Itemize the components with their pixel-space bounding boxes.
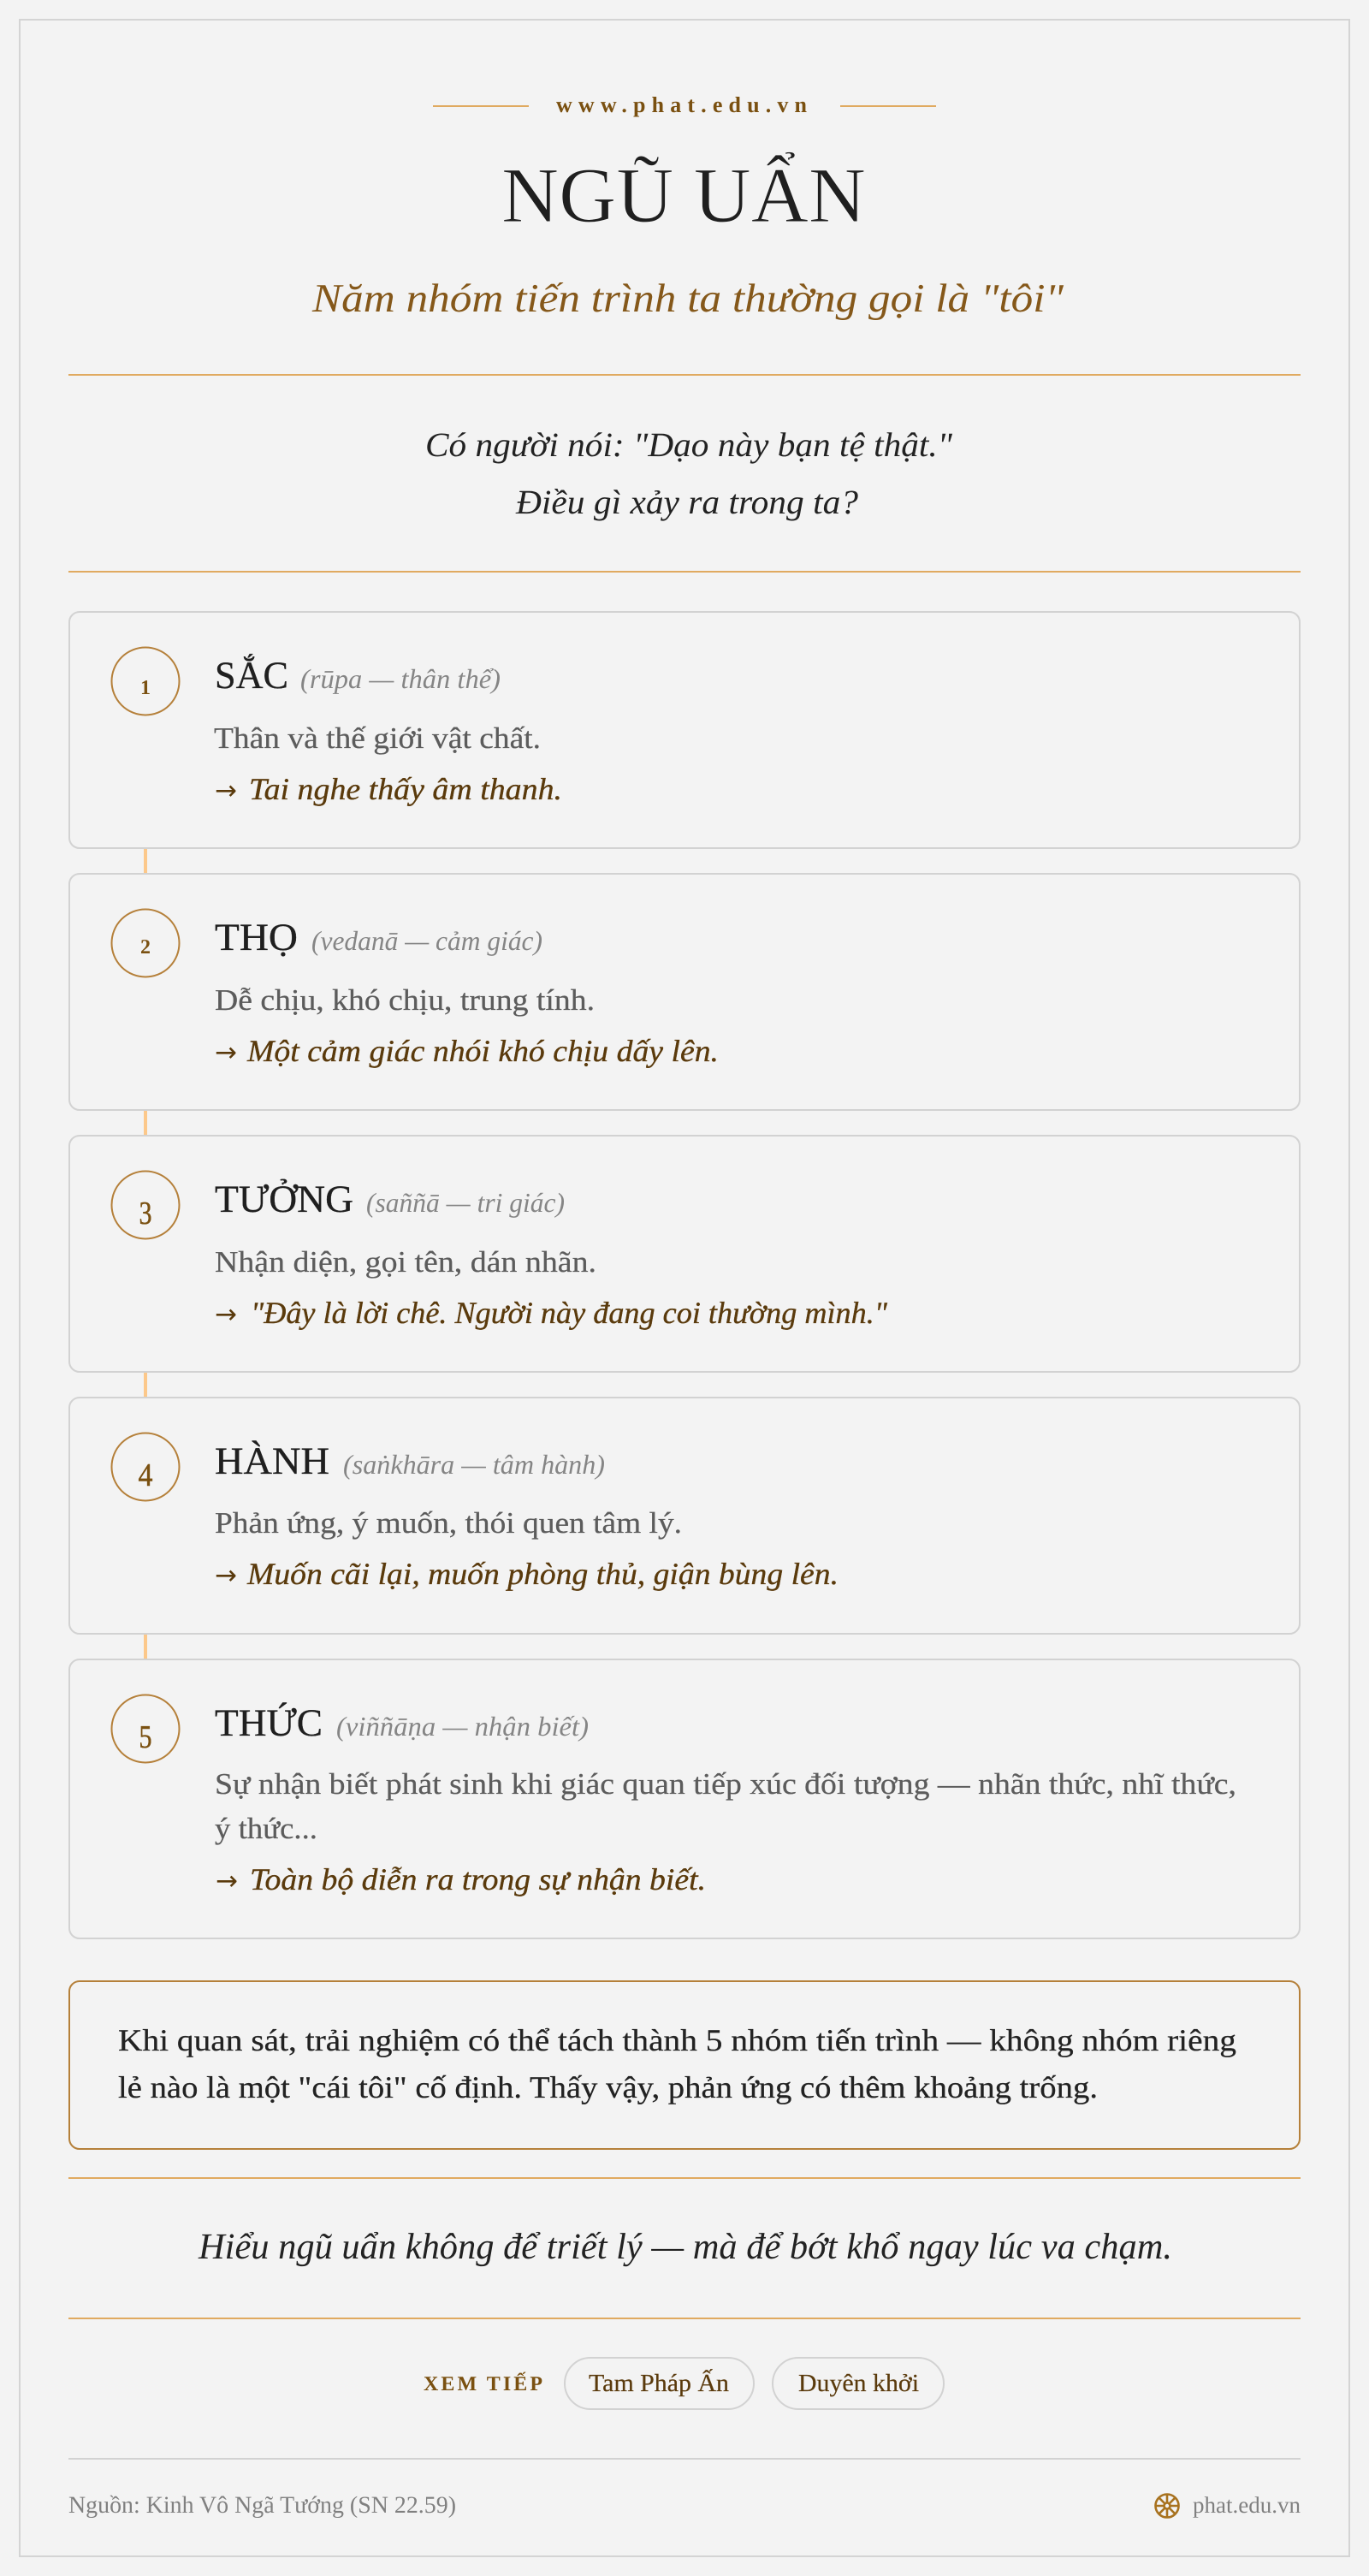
title: NGŨ UẨN xyxy=(501,151,866,239)
see next row xyxy=(424,2358,944,2409)
label: XEM TIẾP xyxy=(424,2371,542,2395)
description: Phản ứng, ý muốn, thói quen tâm lý. xyxy=(215,1506,682,1540)
panel: card 4 Hành xyxy=(69,1398,1300,1634)
number badge 4: 4 xyxy=(139,1457,152,1493)
number badge 3: 3 xyxy=(139,1196,152,1232)
example: → xyxy=(215,1037,237,1068)
divider xyxy=(68,571,1301,573)
intro question xyxy=(425,425,952,521)
intro question: Có người nói: "Dạo này bạn tệ thật." xyxy=(425,425,952,464)
icon: dharma wheel xyxy=(1155,2494,1179,2518)
heading: Thức: THỨC xyxy=(215,1701,323,1744)
heading: Sắc xyxy=(215,654,501,697)
example: → xyxy=(215,775,237,806)
heading: Tưởng: TƯỞNG xyxy=(215,1178,353,1220)
example: Muốn cãi lại, muốn phòng thủ, giận bùng lên. xyxy=(246,1557,839,1591)
panel: card 1 Sắc xyxy=(69,612,1300,848)
description xyxy=(215,1767,1236,1845)
example: → xyxy=(215,1560,237,1591)
number badge 5 xyxy=(111,1695,180,1763)
description: Sự nhận biết phát sinh khi giác quan tiếp xúc đối tượng — nhãn thức, nhĩ thức, xyxy=(215,1767,1236,1801)
connector xyxy=(144,1635,147,1659)
panel: card 3 Tưởng xyxy=(69,1136,1300,1372)
connector xyxy=(144,849,147,873)
number badge 2 xyxy=(111,909,180,977)
heading: Thức: (viññāṇa — nhận biết) xyxy=(336,1711,589,1742)
number badge 2: 2 xyxy=(140,936,151,959)
divider xyxy=(68,374,1301,376)
panel: card 5 Thức xyxy=(69,1659,1300,1938)
example: "Đây là lời chê. Người này đang coi thường mình." xyxy=(251,1296,888,1330)
pill: Duyên khởi: Duyên khởi xyxy=(798,2370,919,2397)
footer divider xyxy=(68,2458,1301,2460)
heading: Tưởng: (saññā — tri giác) xyxy=(366,1187,565,1218)
example: Tai nghe thấy âm thanh. xyxy=(249,772,562,806)
heading: Tưởng xyxy=(215,1178,565,1220)
source: Nguồn: Kinh Vô Ngã Tướng (SN 22.59) xyxy=(68,2492,456,2519)
closing quote: Hiểu ngũ uẩn không để triết lý — mà để bớt khổ ngay lúc va chạm. xyxy=(198,2227,1172,2267)
heading: Thọ: (vedanā — cảm giác) xyxy=(311,925,542,956)
example: → xyxy=(216,1866,238,1896)
number badge 1: 1 xyxy=(140,677,151,699)
example: Toàn bộ diễn ra trong sự nhận biết. xyxy=(250,1862,706,1896)
intro question: Điều gì xảy ra trong ta? xyxy=(515,483,858,521)
description: Dễ chịu, khó chịu, trung tính. xyxy=(215,983,595,1017)
number badge 3 xyxy=(111,1171,180,1239)
callout: Khi quan sát, trải nghiệm có thể tách thành 5 nhóm tiến trình — không nhóm riêng xyxy=(118,2023,1236,2057)
description: Nhận diện, gọi tên, dán nhãn. xyxy=(215,1245,596,1279)
heading: Hành xyxy=(215,1439,605,1482)
panel: card 2 Thọ xyxy=(69,874,1300,1110)
pill: Duyên khởi xyxy=(773,2358,944,2409)
callout: lẻ nào là một "cái tôi" cố định. Thấy vậy, phản ứng có thêm khoảng trống. xyxy=(118,2070,1098,2104)
example: Một cảm giác nhói khó chịu dấy lên. xyxy=(246,1034,719,1068)
site name: phat.edu.vn xyxy=(1193,2492,1301,2518)
heading: Hành: HÀNH xyxy=(215,1439,329,1482)
pill: Tam Pháp Ấn xyxy=(565,2358,754,2409)
heading: Thức xyxy=(215,1701,589,1744)
subtitle: Năm nhóm tiến trình ta thường gọi là "tôi" xyxy=(311,276,1064,321)
divider xyxy=(68,2177,1301,2179)
number badge 4 xyxy=(111,1433,180,1501)
heading: Thọ: THỌ xyxy=(215,916,298,959)
number badge 1 xyxy=(111,647,180,715)
heading: Thọ xyxy=(215,916,542,959)
heading: Hành: (saṅkhāra — tâm hành) xyxy=(343,1449,605,1480)
heading: Sắc: (rūpa — thân thể) xyxy=(300,663,501,694)
heading: Sắc: SẮC xyxy=(215,654,288,697)
pill: Tam Pháp Ấn: Tam Pháp Ấn xyxy=(589,2369,730,2397)
number badge 5: 5 xyxy=(139,1719,152,1755)
connector xyxy=(144,1373,147,1397)
callout xyxy=(69,1981,1300,2149)
connector xyxy=(144,1111,147,1135)
description: ý thức... xyxy=(215,1812,317,1845)
header: website line: www.phat.edu.vn xyxy=(556,92,808,117)
divider xyxy=(68,2318,1301,2319)
example: → xyxy=(215,1299,237,1330)
description: Thân và thế giới vật chất. xyxy=(214,721,541,755)
